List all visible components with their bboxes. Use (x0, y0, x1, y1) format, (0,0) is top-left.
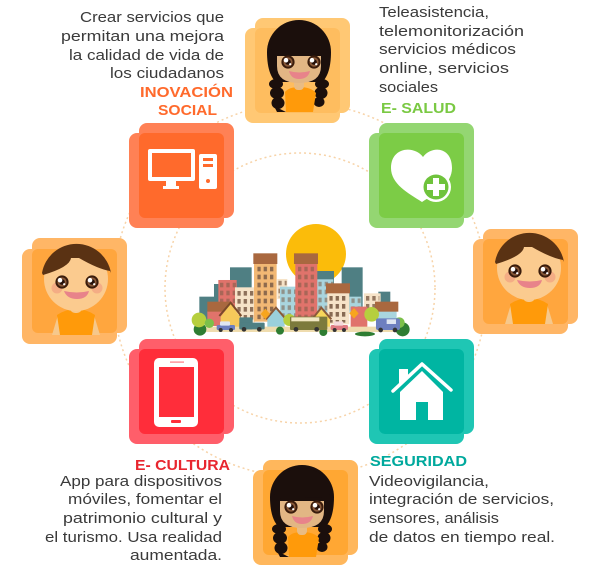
panel: e-salud icon (369, 123, 474, 228)
inner dotted circle (165, 153, 435, 423)
text block: seguridad: sensores, análisis (369, 510, 499, 527)
panel: seguridad icon (369, 339, 474, 444)
text block: seguridad: de datos en tiempo real. (369, 529, 555, 546)
heading: innovación social: SOCIAL (158, 102, 217, 119)
heading: seguridad: SEGURIDAD (370, 453, 467, 470)
icon: heart with plus (391, 150, 452, 202)
text block: e-cultura (45, 473, 223, 564)
text block: seguridad: integración de servicios, (369, 491, 554, 508)
panel: girl top (245, 18, 350, 123)
panel: girl bottom (253, 460, 358, 565)
text block: innovación social: los ciudadanos (110, 65, 224, 82)
text block: innovación social: la calidad de vida de (69, 47, 224, 64)
text block: e-salud: sociales (379, 79, 438, 96)
text block: seguridad (369, 473, 555, 546)
icon: computer (148, 149, 217, 189)
text block: e-cultura: móviles, fomentar el (68, 491, 222, 508)
panel: e-cultura icon (129, 339, 234, 444)
heading: innovación social (140, 83, 233, 119)
text block: innovación social: permitan una mejora (61, 28, 225, 45)
text block: e-salud (379, 4, 524, 96)
cars and bus (217, 317, 400, 332)
text block: innovación social (61, 9, 225, 82)
panel: innovación social icon (129, 123, 234, 228)
city illustration (192, 224, 410, 336)
text block: e-cultura: patrimonio cultural y (63, 510, 223, 527)
text block: seguridad: Videovigilancia, (369, 473, 489, 490)
text block: e-salud: telemonitorización (379, 23, 524, 40)
text block: e-cultura: el turismo. Usa realidad (45, 529, 222, 546)
heading: innovación social: INOVACIÓN (140, 83, 233, 101)
text block: e-salud: servicios médicos (379, 41, 516, 58)
icon: house (393, 364, 451, 420)
panel: boy left (22, 238, 127, 344)
text block: e-salud: online, servicios (379, 60, 509, 77)
text block: e-cultura: App para dispositivos (60, 473, 222, 490)
heading: e-salud: E- SALUD (381, 100, 456, 117)
heading: e-cultura: E- CULTURA (135, 457, 230, 474)
icon: smartphone (154, 358, 198, 427)
connecting ring (113, 103, 487, 477)
text block: e-cultura: aumentada. (130, 547, 222, 564)
text block: e-salud: Teleasistencia, (379, 4, 489, 21)
text block: innovación social: Crear servicios que (80, 9, 224, 26)
panel: boy right (473, 229, 578, 334)
